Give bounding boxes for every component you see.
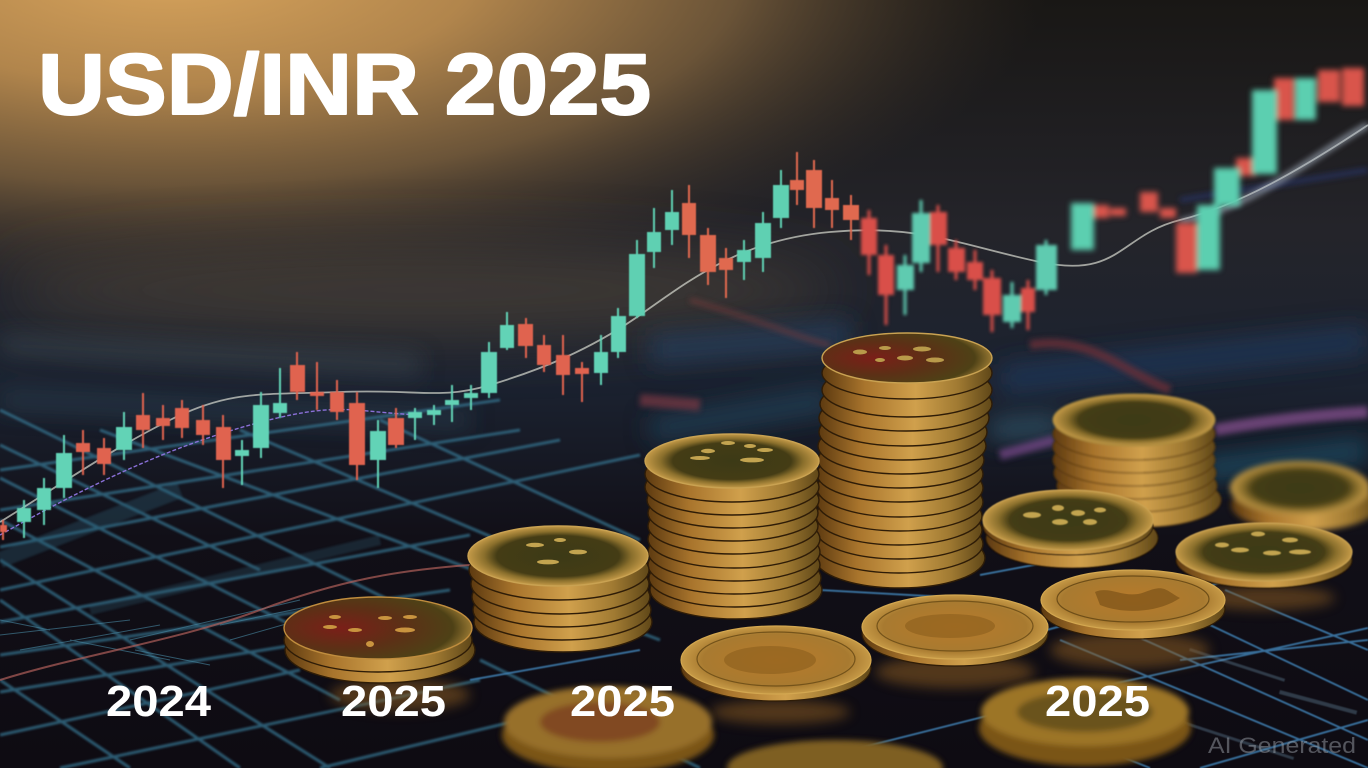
watermark: AI Generated <box>1208 733 1356 758</box>
blurred background floor bands <box>0 335 1368 470</box>
coin: blurred back right <box>1230 461 1368 531</box>
year label 2025 first: 2025 <box>341 677 446 726</box>
coin stack: 2024 <box>284 597 475 683</box>
title: USD/INR 2025 <box>38 37 651 133</box>
coin: single centre <box>862 595 1048 666</box>
right grid floor <box>470 560 1368 768</box>
coin stack: back right <box>1053 394 1221 527</box>
coin stack: right pair <box>983 490 1158 568</box>
year label 2025 second: 2025 <box>570 677 675 726</box>
red trend line on floor <box>0 565 470 680</box>
coin stack: small left <box>468 526 652 652</box>
coin: single front <box>681 626 871 701</box>
coin markings: tallest <box>853 346 944 362</box>
year label 2025 third: 2025 <box>1045 677 1150 726</box>
moving average lines <box>0 125 1368 535</box>
year label 2024: 2024 <box>106 677 212 726</box>
coin stack: middle <box>645 434 822 619</box>
coin markings: single right <box>1215 532 1311 556</box>
coin markings: right pair <box>1023 505 1106 525</box>
coin stack: tallest <box>815 333 992 588</box>
fine data lines on floor <box>0 600 340 665</box>
perspective grid floor <box>0 400 700 768</box>
coin markings: middle <box>690 441 773 462</box>
coin markings: small left <box>526 538 587 564</box>
coin reflections <box>330 586 1335 724</box>
candlestick chart: sharp left section <box>0 308 626 540</box>
candlestick chart: middle section <box>629 152 859 318</box>
coin: single right <box>1176 523 1352 588</box>
coin: single centre right <box>1041 570 1225 639</box>
coin markings: 2024 <box>323 615 417 647</box>
candlestick chart: blurred right section <box>861 200 1057 332</box>
coins: blurred foreground <box>502 678 1191 768</box>
